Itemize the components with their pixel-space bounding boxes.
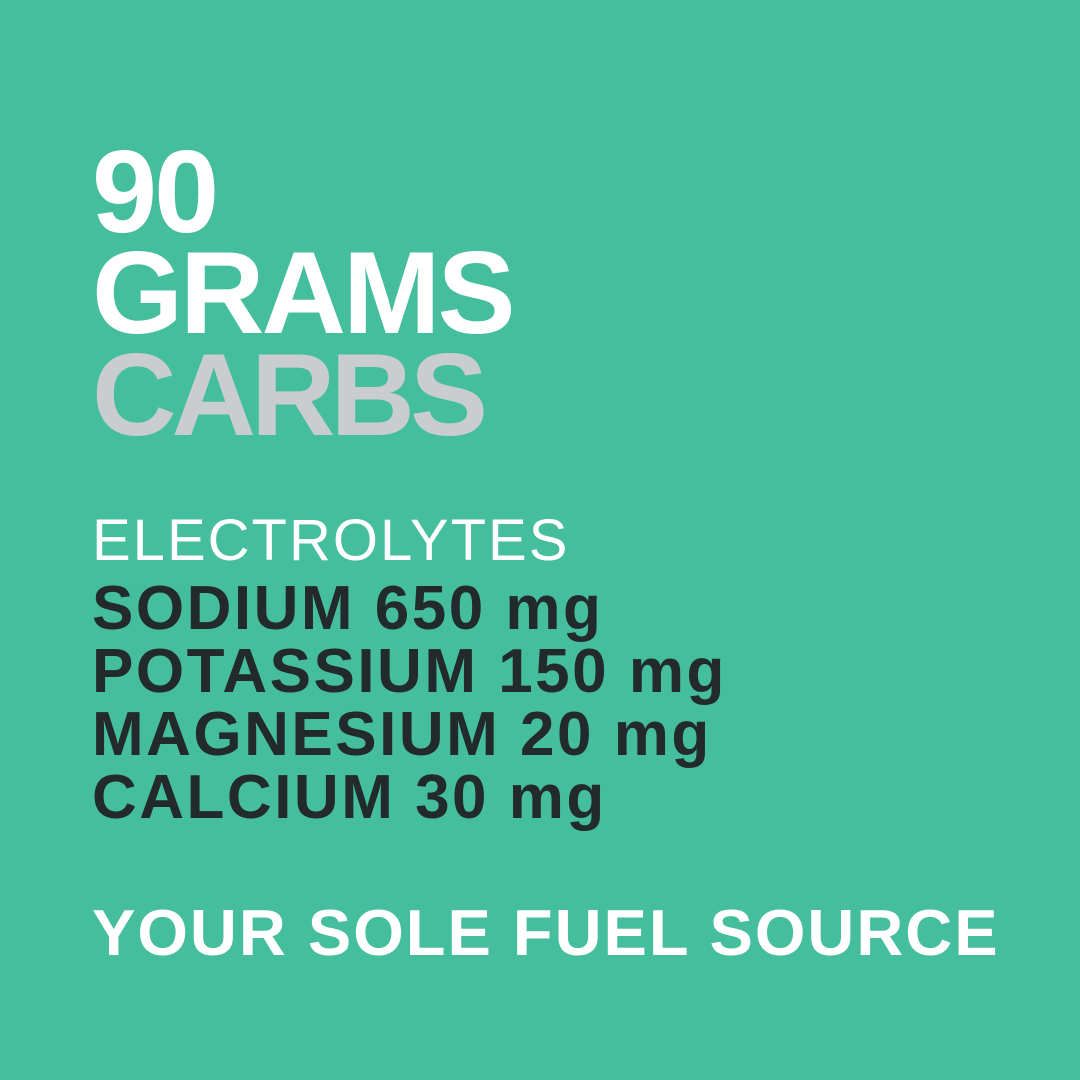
item: potassium: POTASSIUM 150 mg	[92, 637, 727, 706]
tagline: YOUR SOLE FUEL SOURCE	[92, 896, 1000, 969]
headline: GRAMS: GRAMS	[92, 227, 512, 358]
headline: CARBS: CARBS	[92, 329, 483, 460]
headline: 90: 90	[92, 126, 216, 257]
item: sodium: SODIUM 650 mg	[92, 574, 603, 643]
item: calcium: CALCIUM 30 mg	[92, 763, 607, 832]
electrolyte list	[92, 574, 727, 832]
subheading: electrolytes: ELECTROLYTES	[92, 508, 569, 573]
item: magnesium: MAGNESIUM 20 mg	[92, 700, 712, 769]
